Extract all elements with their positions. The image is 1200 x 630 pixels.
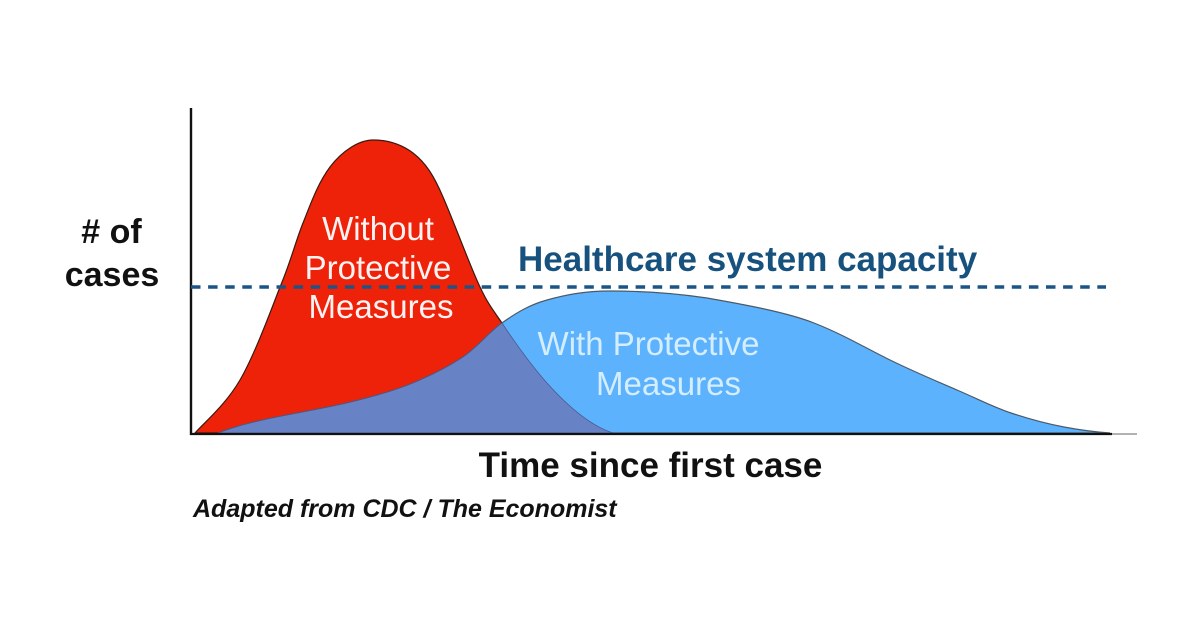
label: with protective measures: [538, 325, 759, 402]
label: without protective measures: Protective: [305, 249, 451, 286]
y axis: [190, 108, 192, 435]
capacity dashed line: [191, 285, 1106, 289]
source note: Adapted from CDC / The Economist: [192, 495, 618, 523]
x axis: [190, 433, 1137, 435]
label: healthcare system capacity: Healthcare system capacity: [518, 240, 978, 279]
label: with protective measures: With Protective: [538, 325, 759, 362]
curve: without protective measures: [195, 140, 613, 433]
y axis title: [65, 213, 159, 294]
label: without protective measures: [305, 210, 453, 325]
label: with protective measures: Measures: [596, 365, 741, 402]
x axis title: Time since first case: [479, 446, 822, 485]
y axis title: # of: [81, 213, 142, 251]
y axis title: cases: [65, 256, 159, 294]
label: without protective measures: Measures: [309, 288, 453, 325]
curve: with protective measures: [218, 291, 1110, 433]
overlap region: [218, 323, 613, 433]
label: without protective measures: Without: [322, 210, 434, 247]
